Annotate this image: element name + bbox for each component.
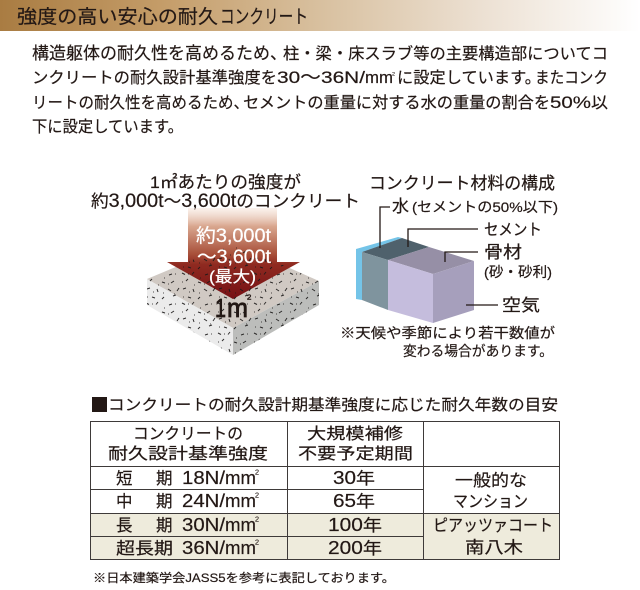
slab surface speckle [147, 243, 319, 328]
group label: this property [433, 517, 553, 557]
label: water: (セメントの50%以下) [412, 199, 558, 215]
row: extra long term: 200 年 [328, 538, 382, 558]
shaded rows [90, 513, 559, 559]
row: medium term: 65年 [333, 491, 375, 511]
intro paragraph: ² [392, 70, 395, 80]
composition block [356, 237, 474, 323]
label: cement: セメント [484, 222, 542, 239]
intro paragraph: 30～36N/ [277, 68, 365, 87]
label: aggregate [484, 243, 552, 280]
composition note [340, 325, 555, 359]
group label: this property: ピアッツァコート [433, 517, 553, 535]
load label: 約3,000t [196, 225, 272, 247]
intro paragraph: 柱・梁・床スラブ等の主要構造部についてコ [283, 44, 608, 63]
composition note: 変わる場合があります。 [403, 343, 553, 359]
intro paragraph: 50% [550, 93, 591, 112]
group label: general condominium [453, 471, 528, 511]
intro paragraph: ンクリートの耐久設計基準強度を [32, 69, 277, 87]
row: long term: 長 [116, 517, 132, 535]
intro paragraph: リートの耐久性を高めるため、 [32, 94, 249, 112]
row: medium term: 期 [156, 492, 172, 511]
intro paragraph: 構造躯体の耐久性を高めるため、 [32, 44, 287, 63]
row: short term [116, 467, 375, 488]
concrete slab [147, 243, 319, 355]
leader lines [380, 207, 498, 305]
intro paragraph: に設定しています。 [397, 69, 541, 87]
row: medium term: mm [225, 491, 256, 511]
row: short term: 短 [116, 469, 132, 488]
composition title: コンクリート材料の構成 [369, 174, 555, 193]
label: aggregate: (砂・砂利) [484, 264, 552, 280]
footnote: ※日本建築学会JASS5を参考に表記しております。 [93, 570, 395, 585]
load label [196, 225, 272, 286]
row: long term: mm [225, 515, 256, 535]
row: short term: 期 [156, 469, 172, 488]
diagram: strength per square metre [91, 173, 360, 355]
group label: general condominium: 一般的な [455, 471, 527, 490]
group label: this property: 南八木 [465, 538, 523, 557]
row: short term: 18N/ [182, 468, 225, 488]
label: air: 空気 [502, 296, 540, 315]
table heading: コンクリートの耐久設計期基準強度に応じた耐久年数の目安 [108, 396, 558, 414]
row: extra long term: mm [225, 538, 256, 558]
column header: period [298, 425, 413, 463]
row: medium term: 中 [116, 492, 132, 511]
column header: period: 大規模補修 [307, 425, 403, 443]
row: extra long term [116, 537, 382, 558]
row: long term: 30N/ [182, 515, 225, 535]
label: water: 水 [392, 197, 409, 216]
column header: strength: 耐久設計基準強度 [108, 445, 268, 463]
area label: ² [247, 291, 252, 306]
intro paragraph: mm [365, 69, 393, 87]
column header: strength: コンクリートの [133, 425, 243, 443]
diagram: concrete composition [340, 174, 558, 359]
label: water [392, 197, 558, 216]
composition note: ※天候や季節により若干数値が [340, 325, 555, 341]
row: medium term [116, 490, 375, 511]
row: long term: ² [255, 514, 259, 528]
row: long term: 100 年 [328, 515, 382, 535]
area label [215, 291, 252, 323]
column header: strength [108, 425, 268, 463]
area label: m [227, 293, 248, 323]
row: short term: mm [225, 468, 256, 488]
group label: general condominium: マンション [453, 493, 528, 511]
intro paragraph: 以 [591, 95, 608, 112]
section title: 強度の高い安心の耐久 [17, 6, 218, 28]
arrow: downward load [167, 208, 300, 299]
row: extra long term: 超長期 [116, 539, 173, 558]
row: short term: ² [255, 467, 259, 481]
row: long term: 期 [156, 516, 172, 535]
intro paragraph: セメントの重量に対する水の重量の割合を [243, 94, 550, 112]
load label: ～3,600t [197, 247, 272, 268]
row: long term [116, 514, 382, 535]
row: short term: 30年 [333, 468, 375, 488]
strength caption: 約3,000t～3,600tのコンクリート [91, 191, 360, 212]
durability table [90, 421, 560, 560]
header band [0, 0, 640, 31]
area label: 1 [215, 293, 226, 323]
section title [17, 6, 308, 28]
load label: (最大) [209, 268, 256, 286]
row: medium term: 24N/ [182, 491, 225, 511]
row: extra long term: 36N/ [182, 538, 225, 558]
strength caption [91, 173, 360, 212]
strength caption: 1㎡あたりの強度が [150, 173, 301, 192]
column header: period: 不要予定期間 [298, 445, 413, 463]
intro paragraph: 下に設定しています。 [32, 118, 183, 136]
label: aggregate: 骨材 [484, 243, 522, 262]
intro paragraph: またコンク [535, 69, 608, 87]
row: extra long term: ² [255, 537, 259, 551]
row: medium term: ² [255, 490, 259, 504]
section title: コンクリート [220, 6, 308, 28]
table grid [90, 421, 560, 560]
intro paragraph [32, 44, 608, 136]
